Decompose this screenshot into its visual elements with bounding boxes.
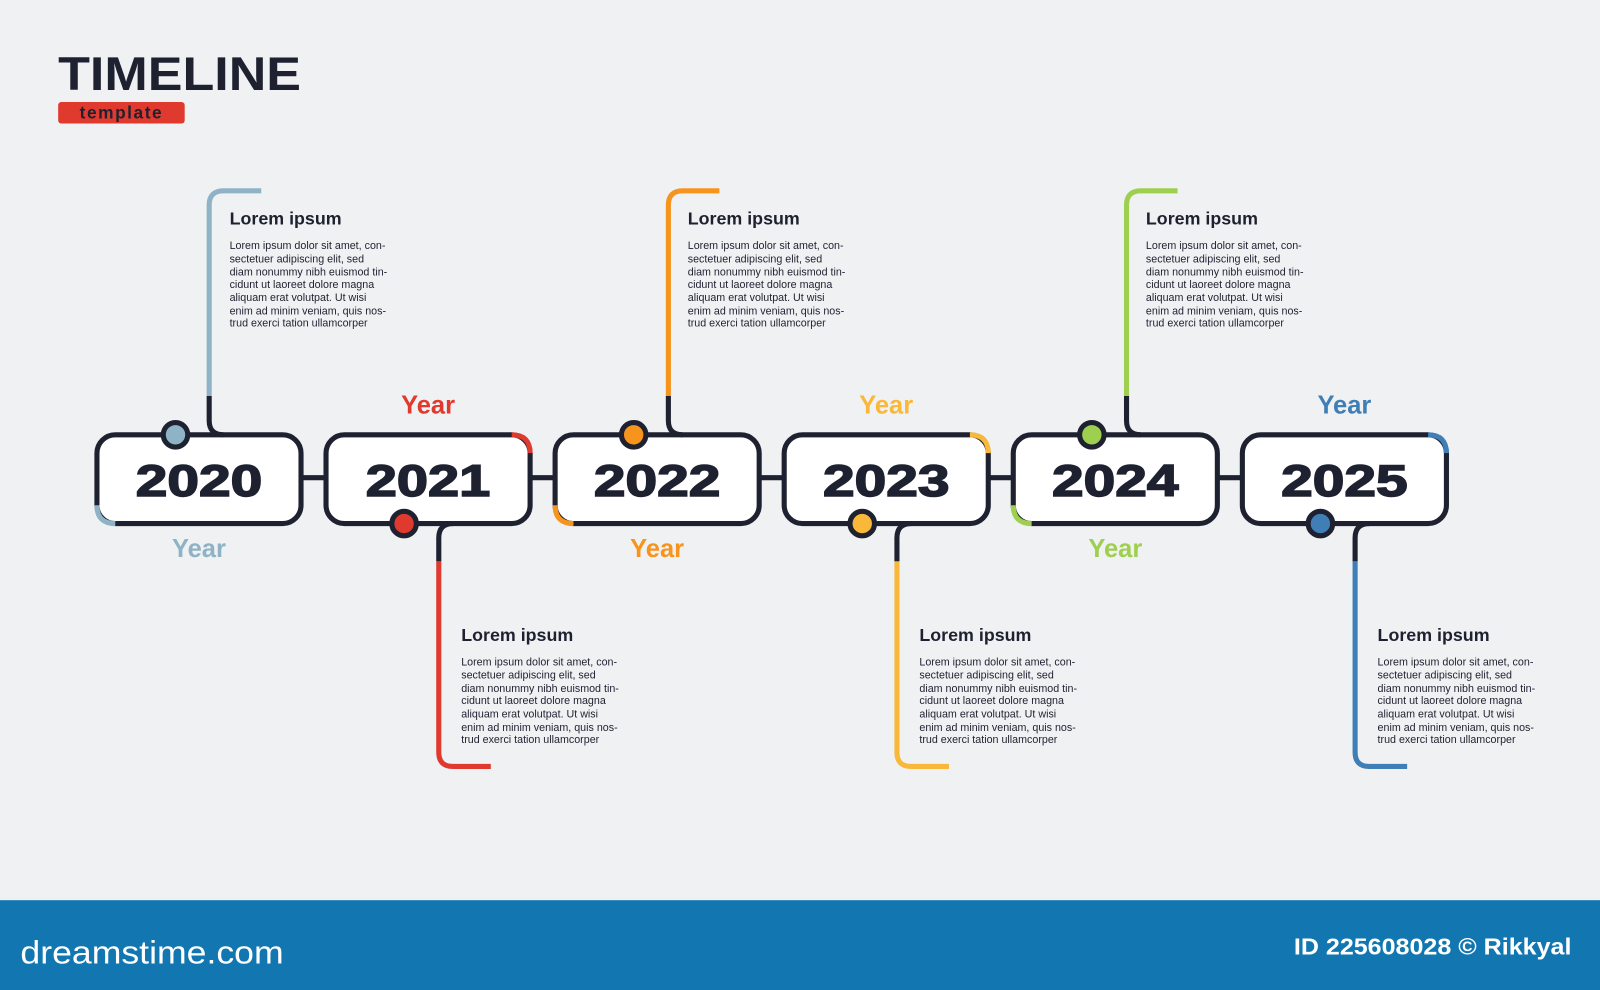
milestone 2023: Lorem ipsum	[919, 625, 1031, 645]
milestone 2021: Year	[401, 391, 455, 419]
milestone 2025: diam nonummy nibh euismod tin-	[1378, 683, 1536, 695]
milestone 2020: cidunt ut laoreet dolore magna	[230, 279, 374, 291]
milestone 2023: cidunt ut laoreet dolore magna	[919, 695, 1064, 707]
milestone 2024: Year	[1088, 535, 1142, 563]
milestone 2022: sectetuer adipiscing elit, sed	[688, 253, 822, 265]
milestone 2021: Lorem ipsum	[461, 625, 573, 645]
milestone 2025: 2025	[1281, 455, 1408, 506]
milestone 2025: aliquam erat volutpat. Ut wisi	[1378, 708, 1514, 720]
milestone 2022: cidunt ut laoreet dolore magna	[688, 279, 832, 291]
milestone 2021: cidunt ut laoreet dolore magna	[461, 695, 606, 707]
milestone 2023: enim ad minim veniam, quis nos-	[919, 722, 1076, 734]
milestone 2020: Lorem ipsum	[230, 209, 342, 229]
milestone 2025: sectetuer adipiscing elit, sed	[1378, 670, 1512, 682]
milestone 2024: Lorem ipsum dolor sit amet, con-	[1146, 240, 1302, 252]
milestone 2023: 2023	[823, 455, 949, 506]
milestone 2022	[555, 191, 846, 563]
milestone 2023: aliquam erat volutpat. Ut wisi	[919, 708, 1056, 720]
footer bar: ID 225608028 © Rikkyal	[1294, 933, 1571, 959]
milestone 2023: diam nonummy nibh euismod tin-	[919, 683, 1077, 695]
milestone 2022: diam nonummy nibh euismod tin-	[688, 267, 846, 279]
milestone 2022: Lorem ipsum	[688, 209, 800, 229]
milestone 2023: trud exerci tation ullamcorper	[919, 734, 1058, 746]
milestone 2020: enim ad minim veniam, quis nos-	[230, 305, 386, 317]
title: template	[80, 102, 163, 122]
milestone 2020: 2020	[136, 455, 262, 506]
milestone 2025: Lorem ipsum	[1378, 625, 1490, 645]
milestone 2025: Lorem ipsum dolor sit amet, con-	[1378, 656, 1534, 668]
milestone 2020	[97, 191, 388, 563]
milestone 2021: diam nonummy nibh euismod tin-	[461, 683, 619, 695]
milestone 2024: cidunt ut laoreet dolore magna	[1146, 279, 1291, 291]
milestone 2022: Year	[630, 535, 684, 563]
milestone 2024	[1013, 191, 1304, 563]
footer bar: dreamstime.com	[20, 933, 284, 970]
milestone 2024: sectetuer adipiscing elit, sed	[1146, 253, 1280, 265]
milestone 2020: sectetuer adipiscing elit, sed	[230, 253, 364, 265]
milestone 2024: trud exerci tation ullamcorper	[1146, 318, 1284, 330]
milestone 2021: Lorem ipsum dolor sit amet, con-	[461, 656, 617, 668]
milestone 2025: Year	[1317, 391, 1371, 419]
milestone 2022: aliquam erat volutpat. Ut wisi	[688, 292, 825, 304]
milestone 2020: Year	[172, 535, 226, 563]
milestone 2025: enim ad minim veniam, quis nos-	[1378, 722, 1534, 734]
milestone 2021: sectetuer adipiscing elit, sed	[461, 670, 596, 682]
milestone 2022: enim ad minim veniam, quis nos-	[688, 305, 845, 317]
milestone 2024: aliquam erat volutpat. Ut wisi	[1146, 292, 1283, 304]
milestone 2024: enim ad minim veniam, quis nos-	[1146, 305, 1303, 317]
milestone 2022: trud exerci tation ullamcorper	[688, 318, 826, 330]
milestone 2020: aliquam erat volutpat. Ut wisi	[230, 292, 366, 304]
milestone 2021: enim ad minim veniam, quis nos-	[461, 722, 618, 734]
milestone 2020: diam nonummy nibh euismod tin-	[230, 267, 388, 279]
milestone 2021: trud exerci tation ullamcorper	[461, 734, 600, 746]
title: TIMELINE	[58, 48, 301, 100]
milestone 2020: trud exerci tation ullamcorper	[230, 318, 368, 330]
milestone 2021: 2021	[366, 455, 490, 506]
milestone 2024: Lorem ipsum	[1146, 209, 1258, 229]
milestone 2021	[326, 391, 619, 766]
milestone 2021: aliquam erat volutpat. Ut wisi	[461, 708, 598, 720]
footer bar	[0, 900, 1600, 990]
milestone 2024: 2024	[1052, 455, 1179, 506]
milestone 2025: trud exerci tation ullamcorper	[1378, 734, 1516, 746]
title	[58, 48, 301, 123]
milestone 2023: Lorem ipsum dolor sit amet, con-	[919, 656, 1076, 668]
milestone 2025: cidunt ut laoreet dolore magna	[1378, 695, 1522, 707]
milestone 2022: Lorem ipsum dolor sit amet, con-	[688, 240, 844, 252]
milestone 2025	[1242, 391, 1536, 766]
milestone 2023: sectetuer adipiscing elit, sed	[919, 670, 1054, 682]
connectors between boxes	[301, 475, 1243, 480]
milestone 2023	[784, 391, 1077, 766]
milestone 2023: Year	[859, 391, 913, 419]
milestone 2024: diam nonummy nibh euismod tin-	[1146, 267, 1304, 279]
milestone 2022: 2022	[594, 455, 720, 506]
milestone 2020: Lorem ipsum dolor sit amet, con-	[230, 240, 386, 252]
